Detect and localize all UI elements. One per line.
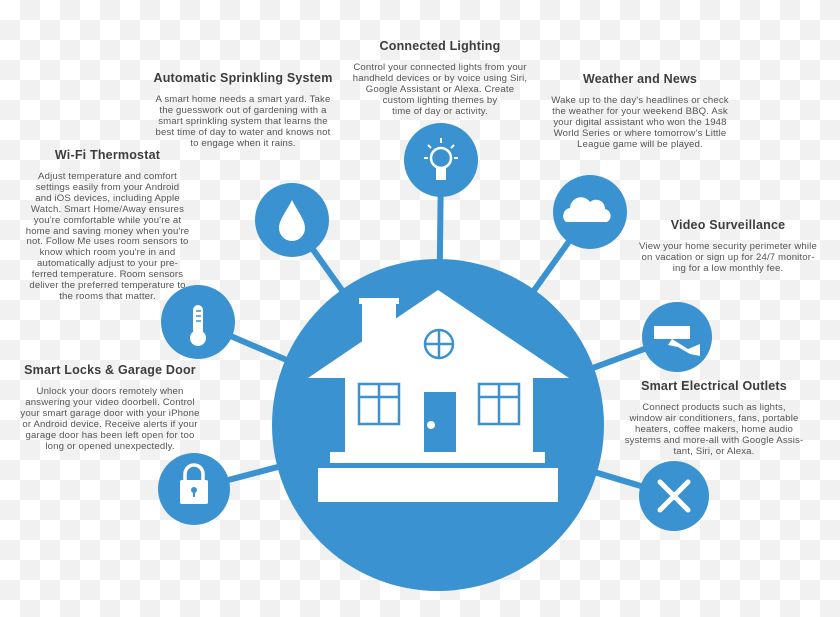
text: wi-fi thermostat: know which room you're in and (40, 247, 175, 258)
text: smart locks: long or opened unexpectedly. (45, 441, 175, 452)
text: smart outlets: systems and more-all with Google Assis- (625, 435, 803, 446)
text: video surveillance: ing for a low monthly fee. (673, 263, 783, 274)
text: weather and news: World Series or where tomorrow's Little (554, 128, 726, 139)
text: video surveillance (639, 218, 817, 274)
text: connected lighting: Connected Lighting (380, 39, 500, 53)
text: wi-fi thermostat: Adjust temperature and comfort (38, 171, 177, 182)
text: wi-fi thermostat (26, 148, 189, 302)
text: wi-fi thermostat: not. Follow Me uses room sensors to (26, 236, 188, 247)
text: wi-fi thermostat: and iOS devices, including Apple (35, 193, 180, 204)
text: smart locks: your smart garage door with your iPhone (20, 408, 200, 419)
text: wi-fi thermostat: you're comfortable while you're at (34, 215, 181, 226)
text: wi-fi thermostat: settings easily from your Android (36, 182, 179, 193)
text: smart locks: answering your video doorbell. Control (25, 397, 195, 408)
text: connected lighting: Control your connected lights from your (353, 62, 527, 73)
text: smart locks: Unlock your doors remotely when (36, 386, 184, 397)
text: connected lighting: time of day or activity. (392, 106, 488, 117)
text: video surveillance: Video Surveillance (671, 218, 785, 232)
central circle (272, 259, 604, 591)
icon: camera (642, 302, 712, 372)
text: automatic sprinkling: Automatic Sprinkling System (153, 71, 333, 85)
text: wi-fi thermostat: Wi-Fi Thermostat (55, 148, 160, 162)
text: automatic sprinkling: the guesswork out of gardening with a (159, 105, 327, 116)
text: video surveillance: on vacation or sign up for 24/7 monitor- (642, 252, 814, 263)
text: weather and news: your digital assistant who won the 1948 (553, 117, 727, 128)
text: automatic sprinkling (153, 71, 333, 149)
text: weather and news: Wake up to the day's headlines or check (551, 95, 729, 106)
text: weather and news: Weather and News (583, 72, 697, 86)
text: automatic sprinkling: to engage when it rains. (190, 138, 296, 149)
icon: lock (158, 453, 230, 525)
text: smart outlets: Connect products such as lights, (642, 402, 786, 413)
text: weather and news: the weather for your weekend BBQ. Ask (552, 106, 728, 117)
text: smart locks: garage door has been left open for too (26, 430, 194, 441)
text: wi-fi thermostat: ferred temperature. Room sensors (32, 269, 183, 280)
icon: cloud (553, 175, 627, 249)
text: connected lighting (353, 39, 527, 117)
text: smart outlets (625, 379, 803, 457)
text: smart locks: Smart Locks & Garage Door (24, 363, 196, 377)
text: smart outlets: tant, Siri, or Alexa. (673, 446, 754, 457)
text: automatic sprinkling: A smart home needs a smart yard. Take (156, 94, 330, 105)
text: smart locks (20, 363, 200, 452)
icon: thermometer (161, 285, 235, 359)
text: smart outlets: window air conditioners, fans, portable (629, 413, 799, 424)
icon: water drop (255, 183, 329, 257)
house (308, 290, 569, 502)
text: automatic sprinkling: best time of day to water and knows not (156, 127, 330, 138)
text: wi-fi thermostat: the rooms that matter. (59, 291, 156, 302)
text: automatic sprinkling: smart sprinkling system that learns the (158, 116, 328, 127)
text: smart outlets: Smart Electrical Outlets (641, 379, 787, 393)
text: wi-fi thermostat: automatically adjust to your pre- (37, 258, 178, 269)
text: smart outlets: heaters, coffee makers, home audio (635, 424, 793, 435)
icon: tools (639, 461, 709, 531)
text: video surveillance: View your home security perimeter while (639, 241, 817, 252)
text: connected lighting: handheld devices or by voice using Siri, (353, 73, 527, 84)
text: wi-fi thermostat: Watch. Smart Home/Away ensures (31, 204, 184, 215)
text: smart locks: or Android device. Receive alerts if your (22, 419, 198, 430)
text: connected lighting: Google Assistant or Alexa. Create (366, 84, 514, 95)
text: wi-fi thermostat: deliver the preferred temperature to (29, 280, 186, 291)
text: wi-fi thermostat: home and saving money when you're (26, 226, 189, 237)
text: weather and news: League game will be played. (577, 139, 703, 150)
text: weather and news (551, 72, 729, 150)
text: connected lighting: custom lighting themes by (383, 95, 497, 106)
icon: light bulb (404, 123, 478, 197)
